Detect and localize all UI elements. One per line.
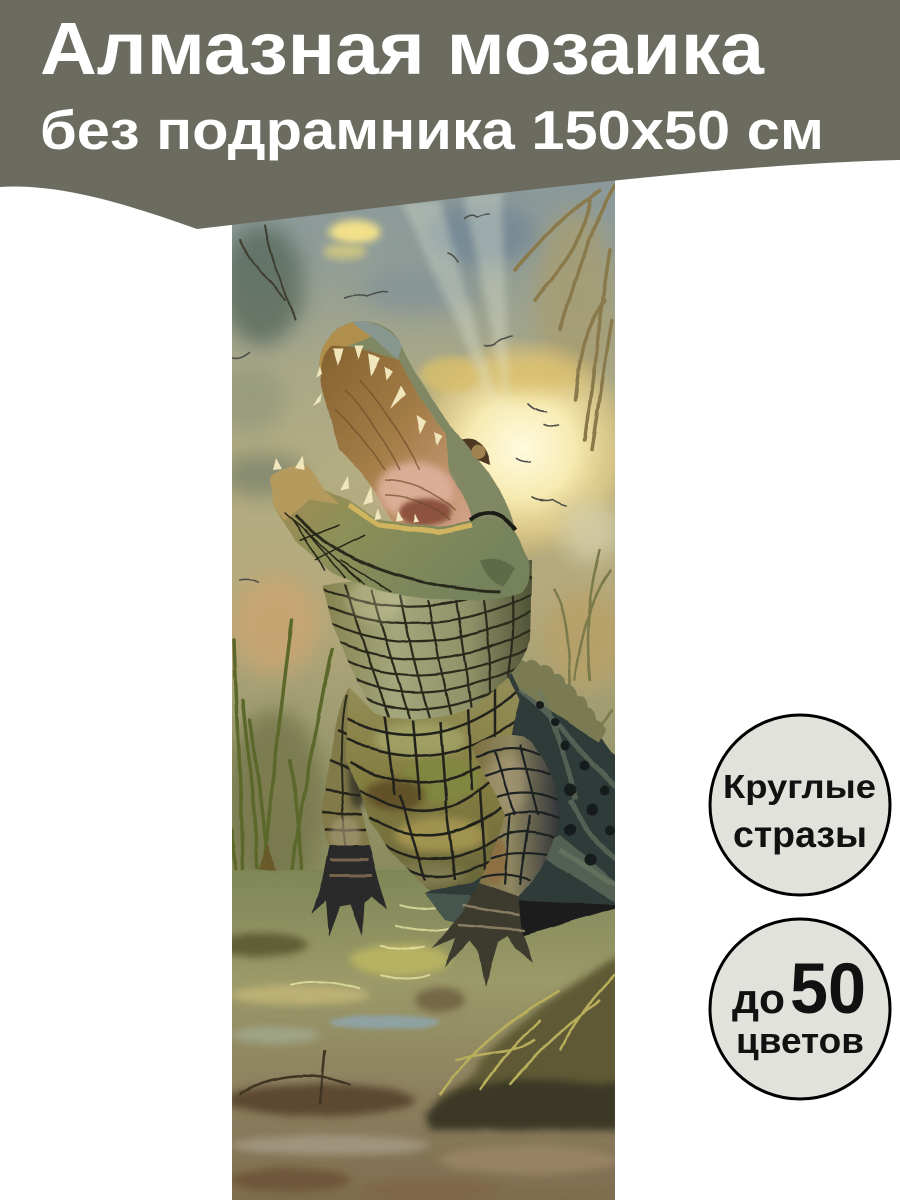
reeds bbox=[232, 183, 615, 870]
badge: up to 50 colours bbox=[710, 919, 890, 1099]
birds bbox=[232, 214, 566, 582]
painting: crocodile in swamp bbox=[232, 180, 615, 1200]
mouth interior bbox=[321, 345, 472, 527]
eye bbox=[462, 439, 490, 465]
left claws bbox=[312, 845, 387, 937]
badge: round rhinestones: Круглые bbox=[723, 768, 876, 805]
subtitle: без подрамника 150х50 см bbox=[40, 99, 824, 161]
teeth bbox=[273, 346, 442, 522]
badge: round rhinestones: стразы bbox=[733, 814, 867, 855]
back ridge scutes bbox=[510, 659, 606, 742]
clouds and sunrise glow bbox=[216, 190, 640, 890]
badge: up to 50 colours: 50 bbox=[790, 950, 866, 1029]
badge: round rhinestones bbox=[710, 715, 890, 895]
crocodile head: upper jaw bbox=[319, 321, 515, 530]
crocodile back and tail bbox=[425, 659, 620, 940]
right claws bbox=[432, 883, 533, 987]
crocodile head: lower jaw bbox=[270, 465, 530, 600]
chest and belly scales bbox=[346, 678, 520, 890]
title: Алмазная мозаика bbox=[40, 7, 765, 90]
right front leg bbox=[432, 735, 560, 987]
header banner bbox=[0, 0, 900, 229]
badge: up to 50 colours: цветов bbox=[736, 1020, 864, 1061]
badge: up to 50 colours: до bbox=[732, 975, 785, 1022]
left front leg bbox=[312, 687, 387, 937]
water and mud bbox=[232, 870, 615, 1200]
neck scales bbox=[320, 560, 535, 725]
